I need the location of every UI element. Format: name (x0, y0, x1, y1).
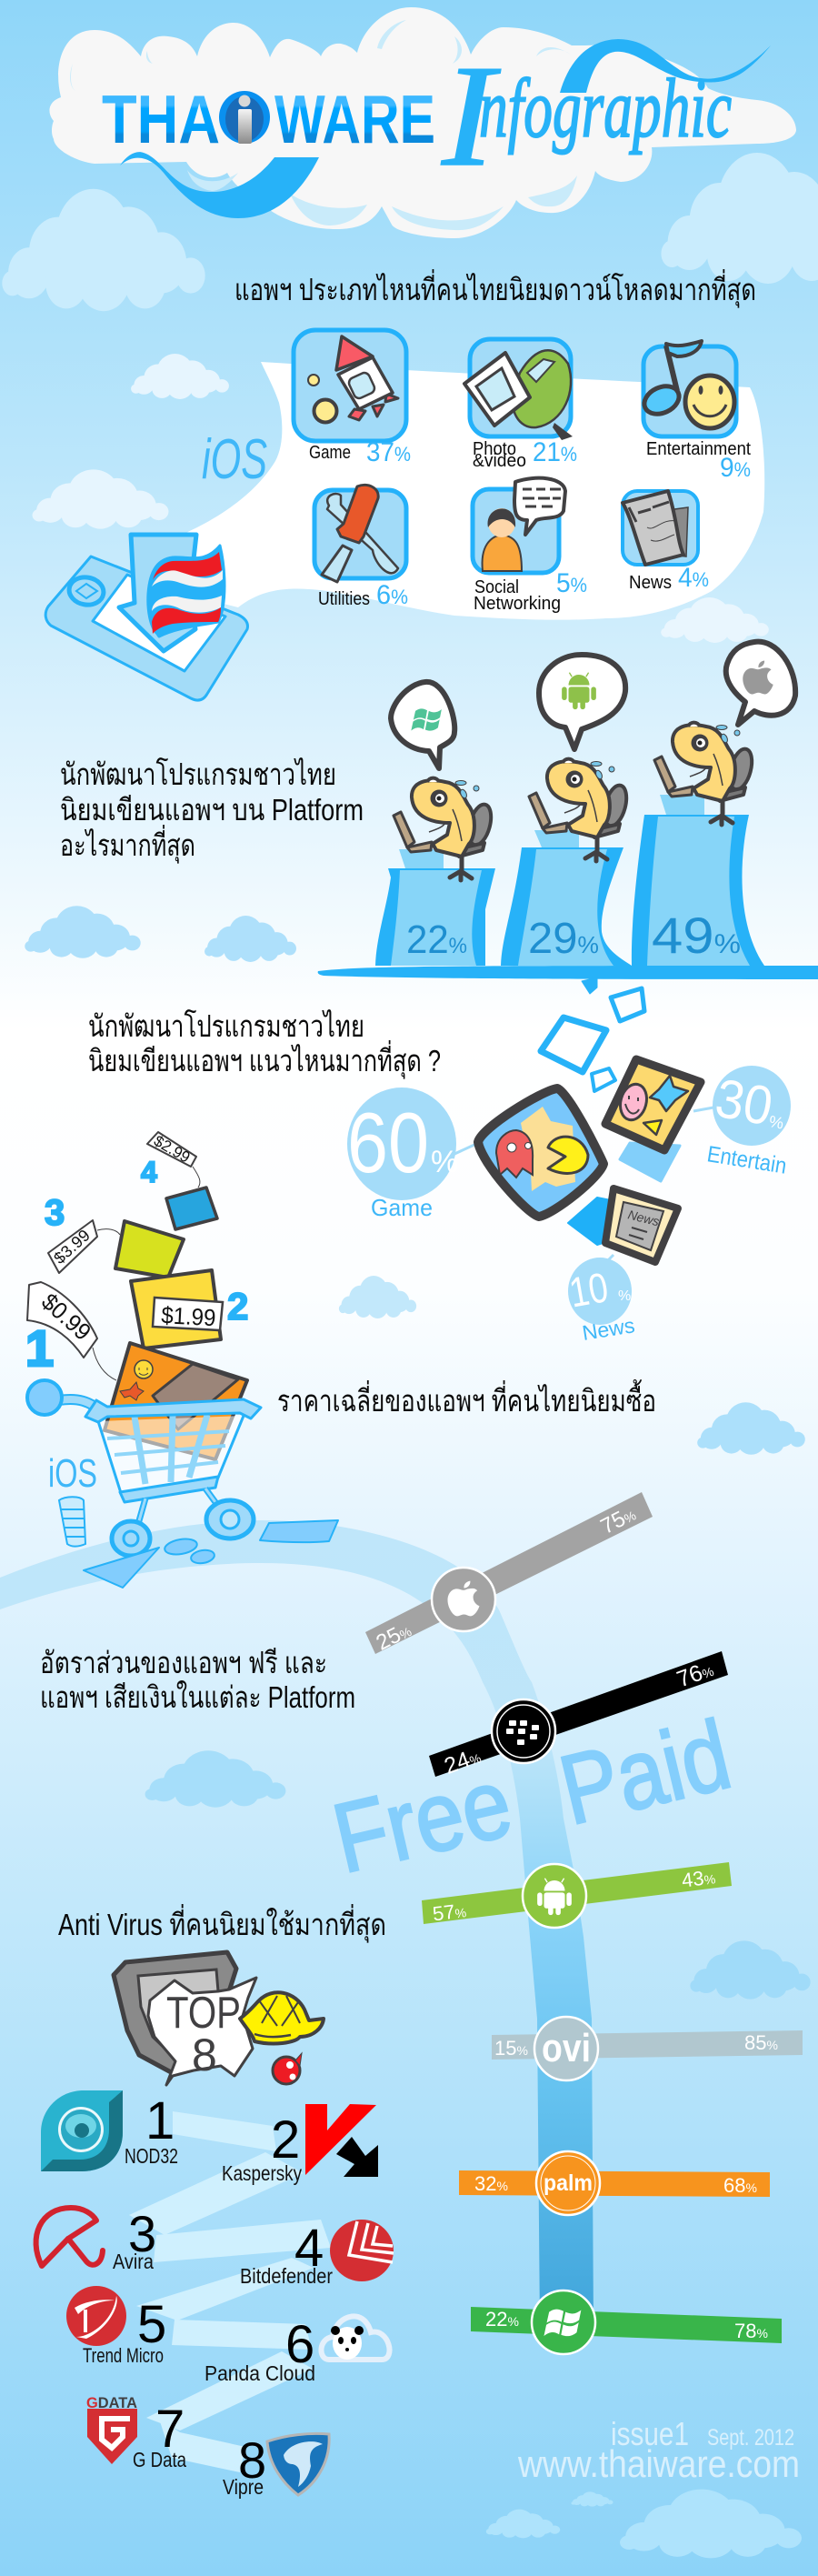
stat: game 60 percent: % (431, 1145, 458, 1179)
item 8: Vipre: 8 (238, 2431, 266, 2489)
free label: Free (324, 1747, 521, 1893)
bar: windows 22/78: 22% (485, 2308, 519, 2330)
stat: entertainment 30 percent: % (768, 1112, 785, 1133)
price tag: 1.99: $1.99 (161, 1301, 216, 1331)
road path (0, 1520, 594, 2328)
entertainment label: Entertainment (646, 439, 751, 459)
item 2: Kaspersky (222, 2104, 378, 2185)
icon: entertainment block (605, 1059, 701, 1181)
item 7: G Data (86, 2394, 186, 2471)
price tag: 3.99 (48, 1220, 120, 1273)
badge: top 8 shield (114, 1952, 256, 2085)
item 2: Kaspersky: 2 (271, 2110, 300, 2170)
bar: apple 25/75 (365, 1492, 653, 1656)
networking label: Networking (474, 594, 561, 614)
icon: utilities tools (314, 485, 406, 582)
chart column: android 29 percent: 29% (528, 915, 599, 963)
bar: apple 25/75: 25% (373, 1618, 415, 1656)
price tag: 3.99: $3.99 (50, 1226, 94, 1268)
icon: news block (568, 1188, 678, 1262)
title: Infographic script (441, 35, 732, 196)
panel heading: นิยมเขียนแอพฯ แนวไหนมากที่สุด ? (88, 1040, 441, 1079)
title cloud (49, 7, 796, 238)
paid label: Paid (550, 1699, 740, 1845)
speech bubble: android (539, 655, 625, 749)
panel heading: อะไรมากที่สุด (60, 825, 195, 864)
item 6: Panda Cloud: 6 (285, 2315, 314, 2374)
badge: top 8 shield: TOP (166, 1989, 241, 2038)
title: THAIWARE logo: WARE (274, 81, 435, 157)
iOS label: iOS (48, 1451, 97, 1496)
price tag: 2.99: $2.99 (151, 1132, 193, 1167)
bar: palm 32/68 (459, 2151, 770, 2215)
panel heading: นิยมเขียนแอพฯ บน Platform (60, 793, 364, 827)
news label: News (629, 573, 672, 593)
panel heading: ราคาเฉลี่ยของแอพฯ ที่คนไทยนิยมซื้อ (277, 1379, 656, 1418)
icon: coins and bills on road (84, 1520, 338, 1588)
game label: Game (309, 443, 351, 463)
chart column: apple 49 percent: 49% (652, 907, 741, 964)
rank: 2: 2 (227, 1285, 248, 1328)
speech bubble: windows (391, 682, 454, 768)
stat: game 60 percent: 60 (347, 1095, 429, 1190)
rank: 1: 1 (25, 1319, 54, 1377)
utilities percent: 6% (376, 580, 408, 610)
white panel shape (136, 362, 764, 620)
bar: android 57/43: 43% (681, 1865, 716, 1892)
bar: blackberry 24/76: 76% (673, 1656, 717, 1692)
bar: palm 32/68: 32% (474, 2172, 508, 2195)
icon: news (623, 491, 698, 565)
stat: entertainment 30 percent: Entertain (705, 1141, 788, 1179)
chart column: android 29 percent (501, 830, 632, 966)
video label: &video (473, 451, 526, 471)
item 4: Bitdefender (240, 2219, 394, 2288)
icon: game rocket (294, 330, 406, 441)
panel heading: อัตราส่วนของแอพฯ ฟรี และ (40, 1646, 327, 1679)
footer: issue and website: issue1 (611, 2415, 689, 2452)
speech bubble: apple (726, 642, 795, 725)
icon: developer at laptop (windows) (394, 778, 495, 880)
stat: game 60 percent (347, 1088, 458, 1221)
box: rank 4 blue (166, 1188, 217, 1229)
footer: issue and website: Sept. 2012 (707, 2425, 794, 2451)
item 1: NOD32: NOD32 (125, 2144, 178, 2168)
social percent: 5% (556, 568, 587, 598)
bar: ovi 15/85: 15% (494, 2037, 528, 2060)
title: Infographic script: I (441, 35, 501, 196)
item 4: Bitdefender: 4 (294, 2219, 324, 2278)
box: rank 3 lime (115, 1221, 184, 1278)
icon: phone with download arrow and Thai flag (45, 535, 248, 700)
item 4: Bitdefender: Bitdefender (240, 2264, 333, 2288)
panel: free vs paid by platform (40, 1492, 803, 2354)
item 7: G Data: 7 (155, 2400, 185, 2459)
item 7: G Data: G Data (133, 2448, 186, 2471)
bar: apple 25/75: 75% (597, 1501, 640, 1539)
item 5: Trend Micro: Trend Micro (83, 2344, 164, 2367)
price tag: 0.99 (27, 1282, 116, 1380)
iOS label: iOS (202, 428, 267, 491)
game percent: 37% (366, 437, 411, 467)
stat: news 10 percent: News (581, 1313, 636, 1345)
icon: shopping cart (27, 1380, 261, 1556)
icon: coin stack (59, 1497, 85, 1547)
badge: top 8 shield: 8 (192, 2030, 217, 2080)
panel heading: แอพฯ เสียเงินในแต่ละ Platform (40, 1680, 355, 1714)
connector lines (453, 1108, 713, 1268)
price tag: 0.99: $0.99 (36, 1288, 96, 1346)
rank: 3: 3 (45, 1193, 65, 1233)
panel: developer platform share (60, 642, 818, 979)
bar: ovi 15/85 (492, 2017, 803, 2080)
item 1: NOD32 (41, 2090, 178, 2171)
icon: photo and video (464, 339, 573, 440)
title: THAIWARE logo: THA (102, 81, 220, 157)
icon: news block: News (626, 1207, 661, 1228)
item 3: Avira: 3 (128, 2205, 156, 2262)
entertainment percent: 9% (720, 453, 751, 483)
stat: game 60 percent: Game (371, 1194, 433, 1221)
rank: 4: 4 (141, 1156, 157, 1188)
bar: android 57/43: 57% (432, 1899, 467, 1925)
bar: windows 22/78 (471, 2290, 782, 2354)
base bar (318, 966, 818, 979)
item 1: NOD32: 1 (145, 2091, 175, 2150)
item 5: Trend Micro (66, 2286, 166, 2367)
panel: developer app genres (88, 977, 791, 1345)
stat: news 10 percent: 10 (565, 1263, 612, 1317)
panel heading (88, 1009, 441, 1079)
bar: palm 32/68: palm (544, 2170, 593, 2196)
chart column: apple 49 percent (632, 795, 764, 966)
panel: average app price (25, 1132, 656, 1588)
item 8: Vipre (223, 2431, 329, 2499)
decorative squares (541, 977, 644, 1091)
item 7: G Data: GDATA (86, 2394, 137, 2411)
box: rank 1 orange (105, 1343, 247, 1459)
footer: issue and website (517, 2415, 800, 2485)
icon: social networking (473, 478, 565, 573)
stat: entertainment 30 percent: 30 (711, 1067, 777, 1137)
icon: game pacman (478, 1088, 604, 1217)
photo label: Photo (473, 439, 516, 459)
bar: ovi 15/85: ovi (542, 2026, 591, 2070)
item 3: Avira (36, 2205, 156, 2273)
icon: virus bug (273, 2053, 302, 2084)
icon: developer at laptop (apple) (654, 723, 756, 825)
panel heading: Anti Virus ที่คนนิยมใช้มากที่สุด (58, 1904, 386, 1943)
photo percent: 21% (533, 437, 577, 467)
item 6: Panda Cloud (204, 2315, 390, 2385)
bar: android 57/43 (422, 1862, 732, 1928)
item 8: Vipre: Vipre (223, 2475, 264, 2499)
chart column: windows 22 percent: 22% (406, 917, 467, 962)
item 3: Avira: Avira (113, 2250, 154, 2273)
stat: entertainment 30 percent (705, 1066, 791, 1179)
price tag: 2.99 (147, 1132, 200, 1188)
panel heading (60, 757, 364, 864)
title: THAIWARE logo (102, 81, 435, 157)
bar: blackberry 24/76: 24% (441, 1743, 484, 1779)
panel heading: นักพัฒนาโปรแกรมชาวไทย (88, 1009, 364, 1043)
social label: Social (474, 577, 519, 597)
box: rank 2 yellow (131, 1270, 221, 1348)
icon: developer at laptop (android) (529, 759, 631, 861)
bar: windows 22/78: 78% (734, 2320, 768, 2342)
panel: iOS app categories (136, 269, 764, 620)
chart column: windows 22 percent (375, 849, 495, 966)
panel: antivirus top 8 (36, 1904, 394, 2499)
item 6: Panda Cloud: Panda Cloud (204, 2361, 315, 2385)
item 2: Kaspersky: Kaspersky (222, 2161, 302, 2185)
panel heading: นักพัฒนาโปรแกรมชาวไทย (60, 757, 336, 791)
bar: palm 32/68: 68% (723, 2174, 757, 2197)
icon: entertainment note and smiley (640, 341, 736, 436)
icon: helmet (240, 1992, 324, 2043)
panel heading (40, 1646, 355, 1714)
news percent: 4% (678, 563, 709, 593)
item 5: Trend Micro: 5 (137, 2295, 166, 2354)
bar: blackberry 24/76 (429, 1651, 728, 1779)
title: ribbon swooshes (120, 39, 771, 218)
utilities label: Utilities (318, 589, 370, 609)
zigzag ribbon (129, 2111, 331, 2472)
stat: news 10 percent (565, 1258, 636, 1345)
stat: news 10 percent: % (618, 1288, 631, 1304)
bar: ovi 15/85: 85% (744, 2031, 778, 2054)
